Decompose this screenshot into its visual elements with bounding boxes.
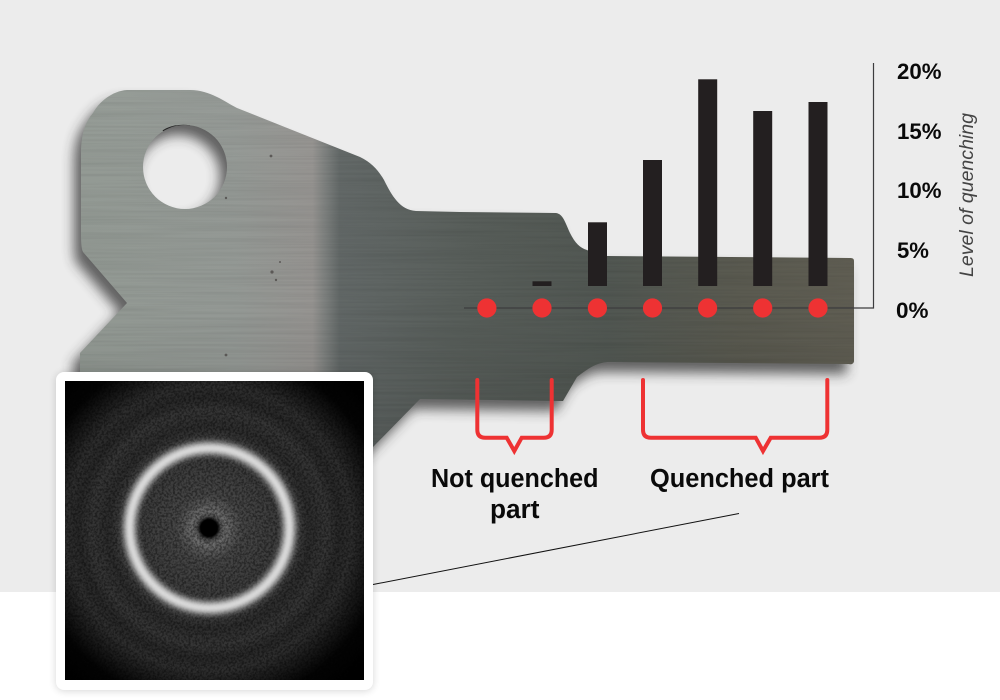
axis title: Level of quenching [957,113,978,277]
label: quenched part: Quenched part [650,465,829,493]
axis tick labels: 5% [897,238,929,263]
axis tick labels: 20% [897,59,942,84]
red measurement dots [477,298,828,318]
bar chart: level of quenching [464,59,978,323]
axis tick labels: 0% [896,298,928,323]
bracket: not quenched part [477,380,552,451]
key photo: metal part [70,80,870,460]
diffraction image [65,381,364,680]
axis tick labels: 10% [897,178,942,203]
chart axis [464,63,874,308]
label: not quenched part: part [490,496,540,524]
label: not quenched part: Not quenched [431,465,598,493]
axis tick labels: 15% [897,119,942,144]
bracket: quenched part [643,380,827,451]
axis tick labels [896,59,942,323]
callout line to inset [373,514,739,584]
inset: diffraction pattern card [56,372,373,691]
chart bars [532,79,828,286]
label: not quenched part [431,465,598,524]
